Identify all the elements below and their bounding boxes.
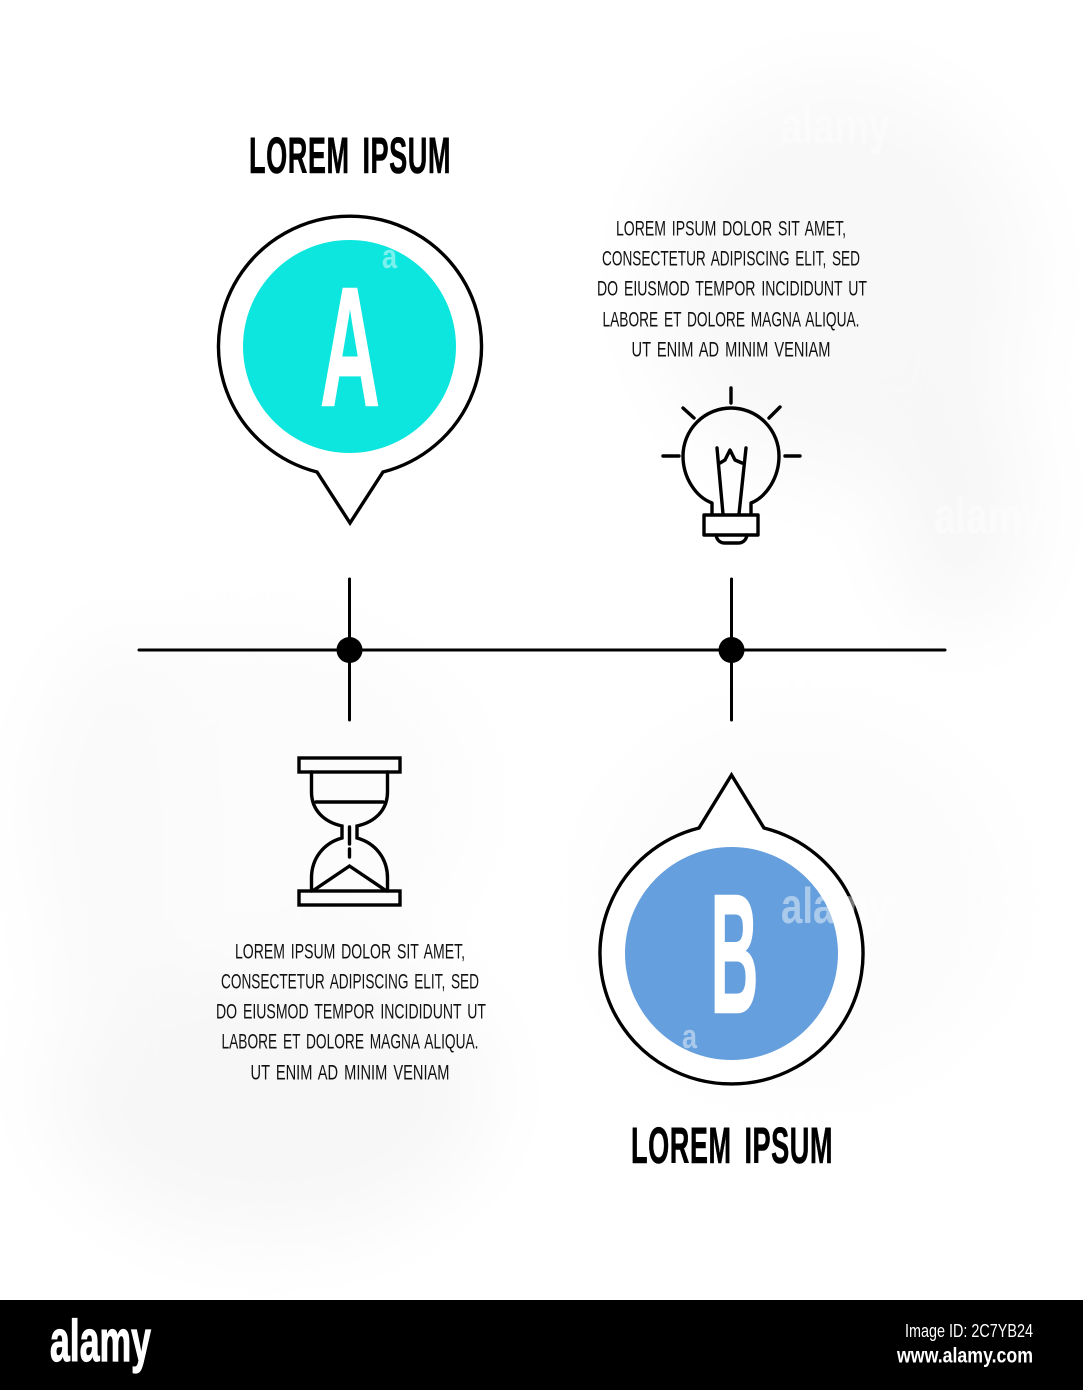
text block bottom left: LABORE ET DOLORE MAGNA ALIQUA. <box>222 1030 478 1054</box>
pin A: A <box>320 252 380 442</box>
text block bottom left <box>216 940 486 1084</box>
footer logo: alamy <box>50 1309 151 1374</box>
watermarks: a <box>682 1018 698 1056</box>
timeline axis <box>139 648 945 652</box>
text block bottom left: CONSECTETUR ADIPISCING ELIT, SED <box>221 970 479 994</box>
text block top right: LOREM IPSUM DOLOR SIT AMET, <box>616 216 846 240</box>
text block top right <box>597 216 867 362</box>
pin A <box>219 216 482 523</box>
text block top right: DO EIUSMOD TEMPOR INCIDIDUNT UT <box>597 276 867 300</box>
watermarks: alamy <box>781 878 890 934</box>
timeline <box>139 579 945 720</box>
text block top right: UT ENIM AD MINIM VENIAM <box>632 338 830 362</box>
pin B blue circle <box>625 847 838 1060</box>
footer bar <box>0 1300 1083 1390</box>
text block bottom left: LOREM IPSUM DOLOR SIT AMET, <box>235 940 465 964</box>
pin A outline <box>219 216 482 523</box>
text block top right: LABORE ET DOLORE MAGNA ALIQUA. <box>602 308 860 332</box>
watermarks: alamy <box>781 98 890 154</box>
text block top right: CONSECTETUR ADIPISCING ELIT, SED <box>602 246 860 270</box>
watermarks: a <box>382 238 398 276</box>
title B: LOREM IPSUM <box>631 1117 833 1174</box>
pin A teal circle <box>243 240 456 453</box>
pin B outline <box>600 775 863 1084</box>
watermarks: alamy <box>934 488 1043 544</box>
icon: hourglass <box>299 758 400 905</box>
watermarks: alamy <box>43 488 152 544</box>
pin B: B <box>710 860 758 1050</box>
image id: Image ID: 2C7YB24 <box>905 1321 1033 1341</box>
website: www.alamy.com <box>896 1344 1033 1368</box>
pin B <box>600 775 863 1084</box>
marker B <box>718 579 744 720</box>
watermarks <box>43 98 1043 1056</box>
marker A <box>336 579 362 720</box>
icon: light bulb <box>663 388 800 543</box>
title A: LOREM IPSUM <box>249 127 451 184</box>
text block bottom left: UT ENIM AD MINIM VENIAM <box>250 1060 450 1084</box>
text block bottom left: DO EIUSMOD TEMPOR INCIDIDUNT UT <box>216 1000 486 1024</box>
